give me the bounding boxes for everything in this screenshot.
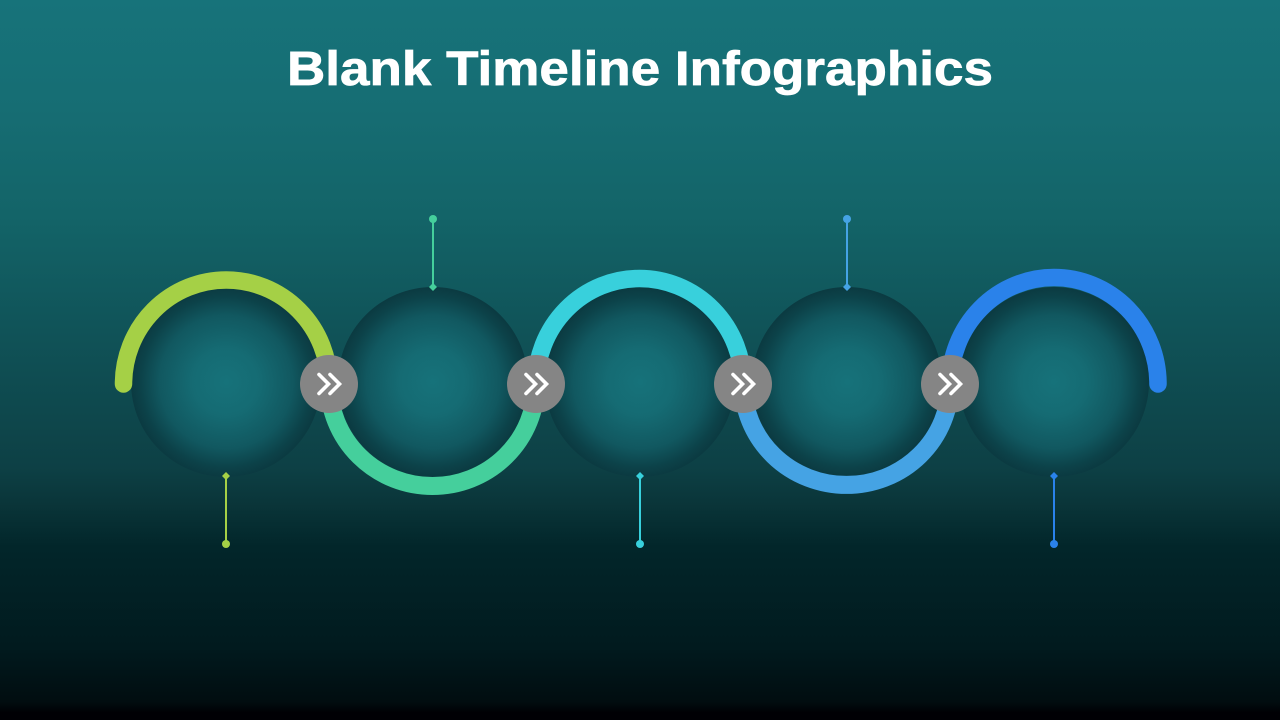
connector button 1 <box>300 355 358 413</box>
pointer 2: green, above <box>429 215 437 291</box>
arc 4: light blue lower <box>743 384 950 485</box>
disc 3 <box>545 287 735 477</box>
title: Blank Timeline Infographics <box>287 43 993 96</box>
arc 3: cyan upper <box>536 278 743 384</box>
connector button 4 <box>921 355 979 413</box>
arc 1: lime upper <box>124 280 329 384</box>
arc 2: green lower <box>329 384 536 486</box>
pointer 4: light blue, above <box>843 215 851 291</box>
arc 5: blue upper <box>950 278 1158 384</box>
disc 2 <box>338 287 528 477</box>
connector button 3 <box>714 355 772 413</box>
disc 5 <box>959 287 1149 477</box>
disc 1 <box>131 287 321 477</box>
pointer 3: cyan, below <box>636 472 644 548</box>
pointer 5: blue, below <box>1050 472 1058 548</box>
disc 4 <box>752 287 942 477</box>
connector button 2 <box>507 355 565 413</box>
pointer 1: lime, below <box>222 472 230 548</box>
